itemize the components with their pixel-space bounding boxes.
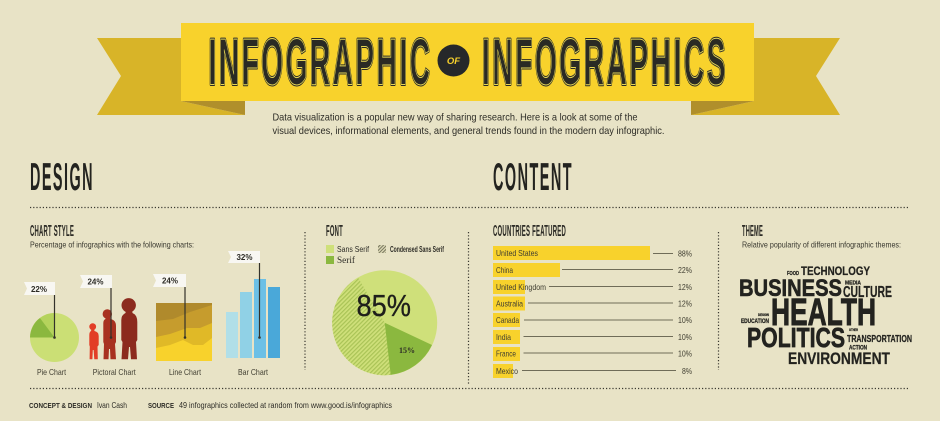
text: DESIGN bbox=[30, 156, 94, 199]
banner ribbon bbox=[97, 23, 840, 115]
panel: chart style bbox=[24, 223, 280, 377]
title: INFOGRAPHIC bbox=[208, 24, 432, 98]
row: India: 10% bbox=[678, 332, 692, 342]
row: United Kingdom: United Kingdom bbox=[496, 282, 546, 292]
row: Mexico bbox=[493, 364, 692, 378]
flag: pie 22%: 22% bbox=[31, 285, 47, 294]
chart style description: Percentage of infographics with the following charts: bbox=[30, 240, 194, 250]
row: Canada: Canada bbox=[496, 315, 519, 325]
footer credits: CONCEPT & DESIGN bbox=[29, 401, 92, 410]
row: Canada bbox=[493, 313, 692, 327]
row: United States bbox=[493, 246, 692, 260]
row: Australia bbox=[493, 296, 692, 310]
word cloud: TECHNOLOGY bbox=[801, 264, 870, 278]
bar chart icon bbox=[226, 279, 280, 377]
panel: chart style: CHART STYLE bbox=[30, 223, 74, 240]
row: United Kingdom bbox=[493, 280, 692, 294]
intro text: visual devices, informational elements, and general trends found in the modern day infographic. bbox=[272, 125, 664, 137]
panel: font bbox=[326, 223, 444, 375]
row: United Kingdom: 12% bbox=[678, 282, 692, 292]
row: United States: 88% bbox=[678, 248, 692, 258]
title: INFOGRAPHIC bbox=[208, 24, 432, 98]
flag: pictoral 24%: 24% bbox=[87, 278, 104, 286]
row: Canada: 10% bbox=[678, 315, 692, 325]
pictoral chart icon bbox=[89, 298, 137, 377]
flag: pictoral 24% bbox=[80, 275, 112, 339]
text: CONTENT bbox=[493, 156, 573, 199]
font pie chart: 85% bbox=[356, 288, 411, 323]
panel: theme: THEME bbox=[742, 223, 763, 240]
flag: bar 32%: 32% bbox=[236, 253, 253, 262]
word cloud: CULTURE bbox=[843, 284, 892, 301]
font legend: Serif bbox=[337, 255, 355, 265]
flag: line 24% bbox=[153, 274, 186, 339]
panel: countries featured bbox=[493, 223, 692, 378]
flag: line 24%: 24% bbox=[162, 276, 178, 286]
row: China: 22% bbox=[678, 265, 692, 275]
panel: countries featured: COUNTRIES FEATURED bbox=[493, 223, 566, 240]
row: China bbox=[493, 263, 692, 277]
word cloud: EDUCATION bbox=[741, 319, 769, 325]
word cloud: BUSINESS bbox=[739, 275, 842, 302]
row: Mexico: 8% bbox=[682, 366, 692, 376]
word cloud: TRANSPORTATION bbox=[847, 334, 912, 345]
word cloud: POLITICS bbox=[747, 322, 845, 353]
pie chart icon: Pie Chart bbox=[37, 367, 67, 377]
panel: theme bbox=[739, 223, 912, 368]
flag: bar 32% bbox=[228, 251, 261, 339]
word cloud: ENVIRONMENT bbox=[788, 349, 890, 368]
font legend: Condensed Sans Serif bbox=[390, 245, 444, 254]
font legend: Sans Serif bbox=[337, 245, 370, 254]
font pie chart bbox=[332, 270, 437, 375]
row: United States: United States bbox=[496, 248, 538, 258]
word cloud: ACTION bbox=[849, 346, 867, 352]
word cloud: HEALTH bbox=[771, 292, 876, 334]
font pie chart: 15% bbox=[399, 346, 415, 355]
line chart icon: Line Chart bbox=[169, 367, 202, 377]
row: Australia: Australia bbox=[496, 298, 523, 308]
footer credits: Ivan Cash bbox=[97, 401, 127, 410]
intro text: Data visualization is a popular new way of sharing research. Here is a look at some of the bbox=[272, 112, 638, 124]
flag: pie 22% bbox=[24, 282, 56, 339]
word cloud bbox=[739, 264, 912, 368]
word cloud: DESIGN bbox=[758, 313, 769, 317]
intro text bbox=[272, 112, 664, 137]
pictoral chart icon: Pictoral Chart bbox=[93, 367, 136, 377]
footer credits: SOURCE bbox=[148, 401, 174, 410]
title: OF bbox=[447, 56, 460, 67]
row: India bbox=[493, 330, 692, 344]
row: France: France bbox=[496, 348, 516, 358]
word cloud: FOOD bbox=[787, 271, 799, 277]
font legend bbox=[326, 245, 444, 265]
row: India: India bbox=[496, 332, 511, 342]
footer credits: 49 infographics collected at random from www.good.is/infographics bbox=[179, 401, 392, 410]
panel: font: FONT bbox=[326, 223, 343, 240]
row: France: 10% bbox=[678, 348, 692, 358]
theme description: Relative popularity of different infographic themes: bbox=[742, 240, 901, 250]
word cloud: MEDIA bbox=[845, 280, 861, 286]
word cloud: OTHER bbox=[849, 328, 858, 332]
line chart icon bbox=[156, 303, 212, 377]
pie chart icon bbox=[30, 313, 79, 377]
footer credits bbox=[29, 401, 392, 410]
bar chart icon: Bar Chart bbox=[238, 367, 269, 377]
row: China: China bbox=[496, 265, 513, 275]
row: Mexico: Mexico bbox=[496, 366, 518, 376]
row: Australia: 12% bbox=[678, 298, 692, 308]
row: France bbox=[493, 347, 692, 361]
